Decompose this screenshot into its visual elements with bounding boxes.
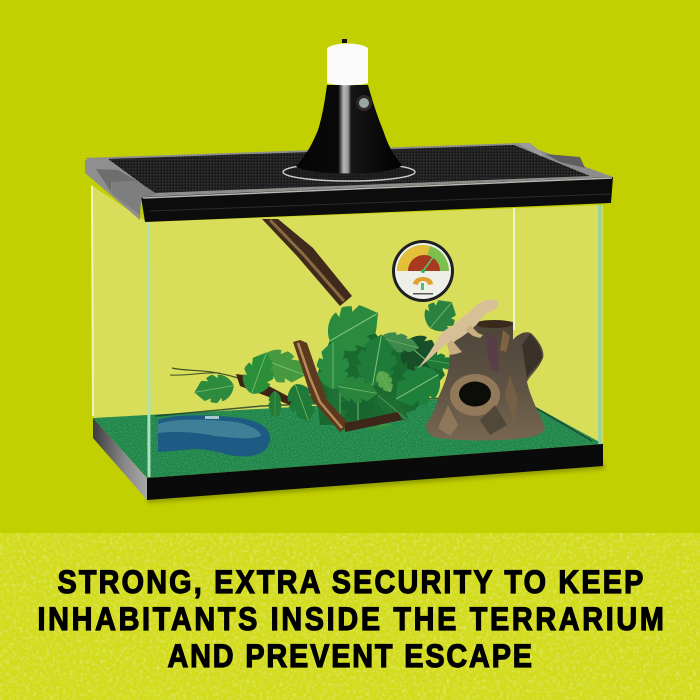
- lid front rail: [141, 177, 613, 222]
- left front glass post: [147, 222, 150, 477]
- floor back edge: [155, 395, 592, 441]
- lower branch: [293, 340, 402, 432]
- line 3: AND PREVENT ESCAPE: [168, 639, 532, 674]
- lid mesh: [108, 145, 590, 193]
- lid outer frame: [85, 143, 613, 197]
- lamp highlight dot: [356, 95, 372, 111]
- right rear glass edge: [513, 208, 515, 330]
- lamp socket: [327, 44, 368, 85]
- lamp bell: [296, 85, 402, 173]
- front leaves: [192, 293, 449, 431]
- right clip: [545, 154, 585, 168]
- lamp ring: [283, 163, 415, 181]
- headline: [38, 565, 664, 674]
- left clip: [96, 169, 137, 192]
- screen lid: [85, 143, 613, 222]
- thermometer gauge: [392, 240, 454, 302]
- upper branch: [262, 219, 352, 306]
- bottom band: [0, 533, 700, 700]
- background: [0, 0, 700, 533]
- glass panels: [91, 185, 603, 477]
- right front glass post: [598, 205, 602, 444]
- lamp cord: [342, 39, 347, 43]
- lid side: [85, 159, 154, 220]
- tank shadow: [147, 462, 605, 503]
- dome lamp: [283, 39, 415, 181]
- line 1: STRONG, EXTRA SECURITY TO KEEP: [58, 565, 643, 600]
- left branch: [170, 368, 295, 405]
- base side: [93, 418, 147, 500]
- crested gecko: [417, 300, 498, 369]
- plant mass: [315, 315, 445, 425]
- base front: [147, 444, 603, 500]
- terrarium: [85, 39, 613, 503]
- line 2: INHABITANTS INSIDE THE TERRARIUM: [38, 602, 664, 637]
- water dish: [158, 415, 270, 456]
- lid front highlight: [143, 178, 612, 198]
- left rear glass edge: [92, 186, 93, 416]
- stump hide: [426, 320, 545, 440]
- rear leaves: [378, 292, 464, 382]
- floor substrate: [93, 395, 603, 478]
